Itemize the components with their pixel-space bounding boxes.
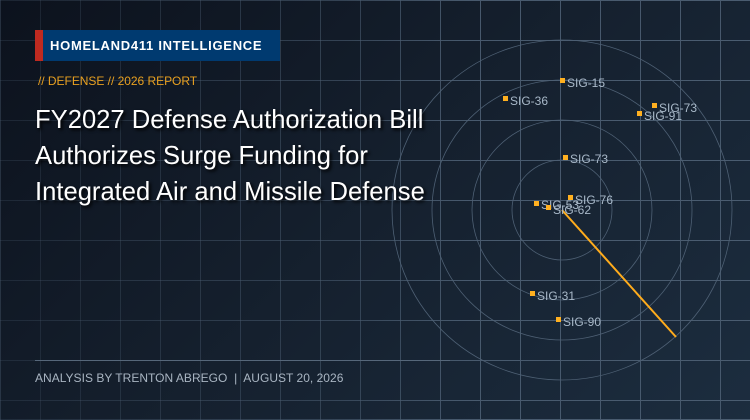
brand name: HOMELAND411 INTELLIGENCE [50, 38, 262, 53]
radar rings [392, 40, 732, 380]
main headline: Integrated Air and Missile Defense [35, 178, 425, 206]
signal SIG-91: SIG-91 [644, 109, 682, 123]
signal SIG-73 upper right: SIG-73 [659, 101, 697, 115]
main headline: Authorizes Surge Funding for [35, 142, 368, 170]
red accent bar [35, 30, 43, 61]
brand banner [35, 30, 280, 61]
signal markers [503, 76, 697, 329]
footer divider [35, 360, 450, 361]
radar sweep line [562, 210, 676, 337]
main headline: FY2027 Defense Authorization Bill [35, 106, 423, 134]
main headline [35, 106, 427, 208]
signal SIG-62: SIG-62 [553, 203, 591, 217]
category tag: // DEFENSE // 2026 REPORT [38, 74, 197, 88]
signal SIG-15: SIG-15 [567, 76, 605, 90]
signal SIG-53: SIG-53 [541, 198, 579, 212]
byline: ANALYSIS BY TRENTON ABREGO | AUGUST 20, 2026 [35, 371, 343, 385]
signal SIG-76: SIG-76 [575, 193, 613, 207]
signal SIG-36: SIG-36 [510, 94, 548, 108]
signal SIG-90: SIG-90 [563, 315, 601, 329]
signal SIG-73 center: SIG-73 [570, 152, 608, 166]
signal SIG-31: SIG-31 [537, 289, 575, 303]
